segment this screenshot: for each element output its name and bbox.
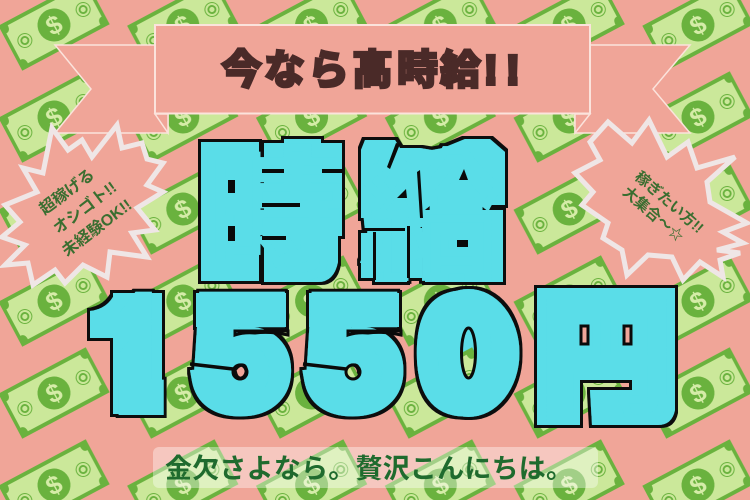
starburst: left bbox=[2, 125, 163, 285]
heading: 今なら高時給 bbox=[221, 47, 481, 93]
burst text: 超稼げる bbox=[36, 166, 98, 218]
big number: 1550 yen bbox=[90, 269, 675, 438]
ribbon left fold bbox=[155, 114, 168, 133]
ribbon banner bbox=[55, 25, 690, 133]
ribbon centre panel bbox=[155, 25, 590, 114]
burst text: 大集合〜☆ bbox=[619, 183, 687, 246]
burst text bbox=[36, 166, 135, 260]
burst text: オシゴト!! bbox=[49, 178, 120, 238]
tagline: 金欠さよなら。贅沢こんにちは。 bbox=[165, 454, 573, 484]
bottom strip bbox=[153, 447, 598, 488]
big number: 1550 yen: 円 bbox=[541, 288, 671, 434]
yen sign slots bbox=[581, 326, 631, 344]
starburst: right bbox=[575, 120, 747, 280]
ribbon left wing bbox=[55, 45, 168, 133]
heading: !! bbox=[484, 47, 520, 93]
ribbon right fold bbox=[575, 114, 590, 133]
burst shape bbox=[2, 125, 163, 285]
big number: 1550 yen: 550 bbox=[197, 269, 509, 437]
burst shape bbox=[575, 120, 747, 280]
wage lettering details bbox=[228, 143, 468, 280]
numeral details bbox=[190, 328, 476, 379]
burst text: 稼ぎたい方!! bbox=[631, 168, 707, 237]
yen sign bbox=[537, 288, 675, 380]
strip background bbox=[153, 447, 598, 488]
big label: hourly wage: 時給 bbox=[204, 141, 500, 293]
burst text: 未経験OK!! bbox=[59, 196, 135, 260]
big number: 1550 yen: 1 bbox=[119, 271, 161, 438]
ribbon right wing bbox=[575, 45, 690, 133]
